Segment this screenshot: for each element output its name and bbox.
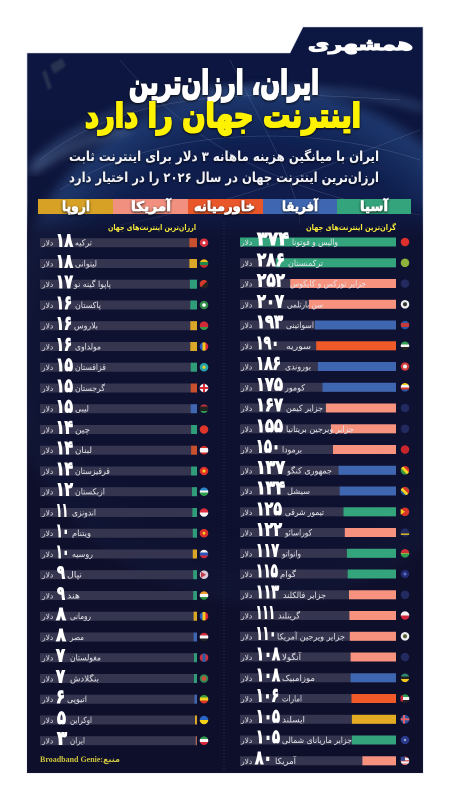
row: Iceland	[240, 705, 409, 727]
row: Saint Barthelemy: سن بارتلمی	[287, 300, 323, 310]
row: Republic of Congo	[240, 456, 409, 478]
row: Libya: دلار	[41, 405, 53, 414]
row: Nepal: دلار	[41, 571, 53, 580]
row: Bermuda: ۱۵۰	[256, 436, 280, 458]
row: Belarus	[40, 313, 208, 335]
row: Vanuatu: ۱۱۷	[256, 539, 279, 561]
heading: most expensive: گران‌ترین اینترنت‌های جهان	[306, 222, 396, 232]
row: Turkey: دلار	[41, 239, 53, 248]
row: Turkmenistan: دلار	[240, 259, 252, 268]
row: Pakistan: دلار	[41, 301, 53, 310]
row: Papua New Guinea: دلار	[41, 280, 53, 289]
row: Curacao: کوراسائو	[284, 528, 313, 538]
row: Guam	[240, 560, 409, 582]
row: Lebanon: لبنان	[75, 446, 92, 456]
row: Moldova	[40, 334, 208, 356]
row: Pakistan	[40, 292, 208, 314]
row: Georgia	[40, 375, 208, 397]
row: Republic of Congo: جمهوری کنگو	[286, 465, 332, 476]
row: Uzbekistan: ۱۲	[56, 479, 73, 501]
row: Egypt: ۸	[56, 624, 66, 646]
row: Romania: دلار	[41, 612, 53, 621]
row: Turkmenistan: ترکمنستان	[288, 259, 324, 269]
row: Curacao	[240, 518, 409, 540]
row: Comoros: دلار	[240, 383, 252, 392]
title: اینترنت جهان را دارد	[85, 96, 361, 136]
subtitle	[69, 148, 379, 186]
row: Mozambique: ۱۰۸	[256, 664, 280, 686]
row: Indonesia	[40, 500, 208, 522]
row: Cayman Islands: دلار	[240, 404, 252, 413]
row: US Virgin Islands: ۱۱۰	[256, 622, 276, 644]
row: Saint Barthelemy: دلار	[240, 300, 252, 309]
row: Greenland	[240, 602, 409, 624]
row: Ethiopia: اتیوپی	[67, 695, 87, 705]
row: Kyrgyzstan: ۱۴	[56, 458, 73, 480]
row: Papua New Guinea	[40, 271, 208, 293]
row: Russia: ۱۰	[56, 541, 69, 563]
row: Lebanon: ۱۴	[56, 437, 73, 459]
logo: همشهری	[308, 35, 413, 54]
row: Syria: ۱۹۰	[256, 332, 279, 354]
row: Ukraine: دلار	[41, 716, 53, 725]
row: Republic of Congo: دلار	[240, 466, 252, 475]
row: Guam: گوام	[280, 569, 297, 580]
row: Comoros: ۱۷۵	[256, 373, 283, 395]
row: Falkland Islands: ۱۱۳	[256, 581, 279, 603]
row: Nepal: ۹	[57, 562, 65, 584]
row: Egypt: مصر	[69, 633, 84, 643]
row: Moldova: مولداوی	[75, 342, 101, 352]
row: Mozambique	[240, 664, 409, 686]
row: Anguilla	[240, 643, 409, 665]
row: Burundi: دلار	[240, 362, 252, 372]
row: Ethiopia: دلار	[41, 695, 53, 704]
row: Moldova: دلار	[41, 342, 53, 352]
row: Bangladesh: دلار	[41, 674, 53, 684]
row: Lithuania: لیتوانی	[75, 260, 97, 270]
row: Mongolia: ۷	[56, 645, 65, 667]
row: China	[40, 416, 208, 438]
row: Bermuda: دلار	[240, 446, 252, 454]
row: Indonesia: اندونزی	[72, 508, 96, 518]
row: China: دلار	[41, 426, 53, 434]
row: Turkey: ۱۸	[56, 230, 73, 252]
row: Mozambique: دلار	[240, 674, 252, 683]
row: Iceland: ۱۰۵	[256, 705, 280, 727]
row: British Virgin Islands: دلار	[240, 425, 252, 434]
row: Turks and Caicos: ۲۵۲	[257, 270, 285, 292]
row: Northern Mariana Islands: ۱۰۵	[256, 726, 280, 748]
row: Curacao: ۱۲۲	[256, 518, 282, 540]
row: Anguilla: دلار	[240, 653, 252, 662]
row: Mongolia: دلار	[41, 654, 53, 663]
row: Egypt: دلار	[41, 633, 53, 642]
row: India: دلار	[41, 592, 53, 600]
row: UAE: دلار	[240, 694, 252, 704]
row: Pakistan: پاکستان	[75, 301, 102, 311]
row: Papua New Guinea: ۱۷	[56, 271, 73, 293]
row: Lebanon	[40, 437, 208, 459]
row: Uzbekistan	[40, 479, 208, 501]
row: Eswatini: ۱۹۳	[256, 311, 283, 333]
row: Burundi: بوروندی	[285, 362, 311, 372]
row: Northern Mariana Islands: دلار	[240, 736, 252, 745]
row: Vietnam: دلار	[41, 529, 53, 538]
row: Vietnam: ۱۰	[56, 520, 69, 542]
row: Turkmenistan	[240, 249, 409, 271]
row: Wallis and Futuna: دلار	[240, 238, 252, 247]
row: Greenland: گرینلند	[278, 610, 301, 622]
subtitle: ارزان‌ترین اینترنت جهان در سال ۲۰۲۶ را در اختیار دارد	[69, 170, 379, 186]
row: Wallis and Futuna	[240, 228, 409, 250]
row: Seychelles	[240, 477, 409, 499]
row: Turkey: ترکیه	[75, 239, 93, 249]
row: Cayman Islands: جزایر کیمن	[286, 404, 323, 414]
row: Nepal: نپال	[67, 571, 82, 581]
row: Uzbekistan: ازبکستان	[75, 488, 105, 498]
row: US Virgin Islands	[240, 622, 409, 644]
row: China: ۱۴	[56, 416, 73, 438]
row: Falkland Islands	[240, 581, 409, 603]
row: Syria: دلار	[240, 342, 252, 351]
row: Curacao: دلار	[240, 528, 252, 538]
title: ایران، ارزان‌ترین	[129, 63, 319, 103]
row: Anguilla: ۱۰۸	[256, 643, 280, 665]
row: Vanuatu: دلار	[240, 549, 252, 558]
row: Timor-Leste	[240, 498, 409, 520]
row: Kazakhstan: دلار	[41, 363, 53, 372]
row: Ukraine: اوکراین	[70, 716, 92, 726]
row: Northern Mariana Islands: جزایر ماریانای شمالی	[282, 736, 352, 746]
legend: continents: آمریکا	[131, 198, 171, 215]
row: Moldova: ۱۶	[56, 334, 72, 356]
row: Northern Mariana Islands	[240, 726, 409, 748]
row: Kazakhstan: ۱۵	[56, 354, 73, 376]
row: India	[40, 582, 208, 604]
row: Mozambique: موزامبیک	[282, 674, 315, 684]
row: Timor-Leste: دلار	[240, 508, 252, 517]
row: Guam: ۱۱۵	[256, 560, 278, 582]
row: Kyrgyzstan: دلار	[41, 467, 53, 476]
row: Seychelles: سیشل	[287, 487, 310, 497]
row: Indonesia: ۱۱	[56, 500, 68, 522]
row: United States: دلار	[240, 757, 252, 766]
row: UAE	[240, 684, 409, 706]
row: Greenland: ۱۱۱	[256, 602, 275, 624]
row: Ethiopia	[40, 686, 208, 708]
row: Iran: ۳	[57, 728, 67, 750]
row: Eswatini	[240, 311, 409, 333]
row: Vietnam	[40, 520, 208, 542]
row: Saint Barthelemy	[240, 290, 409, 312]
row: Vanuatu	[240, 539, 409, 561]
row: US Virgin Islands: جزایر ویرجین آمریکا	[277, 630, 345, 642]
row: British Virgin Islands: ۱۵۵	[256, 415, 283, 437]
row: Russia	[40, 541, 208, 563]
row: Kazakhstan: قزاقستان	[75, 363, 106, 373]
row: Greenland: دلار	[240, 612, 252, 620]
row: China: چین	[75, 426, 90, 436]
row: Russia: روسیه	[72, 550, 93, 560]
legend: continents: آفریقا	[282, 198, 318, 215]
row: Russia: دلار	[41, 550, 53, 559]
row: British Virgin Islands	[240, 415, 409, 437]
row: Burundi	[240, 352, 409, 374]
source note: Broadband Genie:منبع	[40, 754, 120, 765]
row: Ukraine	[40, 707, 208, 729]
row: Timor-Leste: تیمور شرقی	[285, 508, 325, 518]
row: Timor-Leste: ۱۲۵	[256, 498, 282, 520]
subtitle: ایران با میانگین هزینه ماهانه ۳ دلار برای اینترنت ثابت	[69, 148, 379, 165]
row: United States: آمریکا	[275, 755, 297, 767]
legend: continents	[38, 198, 411, 215]
row: Bermuda	[240, 436, 409, 458]
row: Comoros: کومور	[284, 383, 306, 393]
row: Syria	[240, 332, 409, 354]
row: Kyrgyzstan: قرقیزستان	[75, 467, 110, 477]
row: Ethiopia: ۶	[56, 686, 65, 708]
row: Bangladesh: ۷	[56, 666, 65, 688]
row: Kazakhstan	[40, 354, 208, 376]
row: Iran	[40, 728, 208, 750]
row: Georgia: دلار	[41, 384, 53, 393]
row: Wallis and Futuna: والیس و فوتونا	[292, 238, 338, 248]
heading: cheapest: ارزان‌ترین اینترنت‌های جهان	[108, 223, 196, 232]
row: British Virgin Islands: جزایر ویرجین بریتانیا	[286, 425, 354, 435]
row: Seychelles: دلار	[240, 487, 252, 496]
row: Turks and Caicos	[240, 270, 409, 292]
row: United States	[240, 747, 409, 769]
row: Iran: دلار	[41, 737, 53, 746]
row: Iceland: دلار	[240, 715, 252, 724]
row: India: هند	[67, 592, 80, 602]
row: Belarus: ۱۶	[56, 313, 72, 335]
row: Falkland Islands: جزایر فالکلند	[283, 591, 326, 601]
row: Papua New Guinea: پاپوا گینه نو	[73, 279, 112, 290]
legend: continents: خاورمیانه	[194, 199, 255, 215]
row: Turks and Caicos: دلار	[240, 280, 252, 288]
row: Turkey	[40, 230, 208, 252]
row: Romania: رومانی	[70, 612, 91, 622]
row: Guam: دلار	[240, 570, 252, 579]
row: Iran: ایران	[70, 737, 85, 747]
row: Lithuania	[40, 250, 208, 272]
row: Ukraine: ۵	[57, 707, 66, 729]
row: Falkland Islands: دلار	[240, 591, 252, 600]
row: Cayman Islands: ۱۶۷	[256, 394, 283, 416]
row: Libya: لیبی	[75, 405, 89, 415]
panel: cheapest internet list	[40, 230, 208, 750]
row: Nepal	[40, 562, 208, 584]
row: US Virgin Islands: دلار	[240, 632, 252, 641]
row: Eswatini: دلار	[240, 321, 252, 330]
row: Libya: ۱۵	[56, 396, 73, 418]
row: Pakistan: ۱۶	[56, 292, 72, 314]
row: UAE: امارات	[282, 694, 302, 704]
row: Seychelles: ۱۳۴	[256, 477, 285, 499]
legend: continents: آسیا	[360, 198, 388, 215]
row: Iceland: ایسلند	[282, 715, 305, 725]
row: Belarus: دلار	[41, 322, 53, 331]
row: India: ۹	[57, 582, 65, 604]
row: Comoros	[240, 373, 409, 395]
row: Lebanon: دلار	[41, 446, 53, 455]
row: Lithuania: دلار	[41, 260, 53, 268]
row: Burundi: ۱۸۶	[256, 352, 281, 374]
row: Syria: سوریه	[286, 342, 311, 352]
row: United States: ۸۰	[255, 747, 272, 769]
row: Anguilla: آنگولا	[282, 651, 302, 663]
row: Mongolia	[40, 645, 208, 667]
row: Turks and Caicos: جزایر تورکس و کایکوس	[290, 280, 366, 290]
row: Turkmenistan: ۲۸۶	[257, 249, 285, 271]
row: Georgia: ۱۵	[56, 375, 73, 397]
row: Indonesia: دلار	[41, 508, 53, 518]
row: Libya	[40, 396, 208, 418]
row: Saint Barthelemy: ۲۰۷	[257, 290, 284, 312]
row: Vietnam: ویتنام	[72, 529, 91, 539]
row: Vanuatu: وانواتو	[281, 549, 301, 559]
row: Belarus: بلاروس	[74, 322, 98, 332]
row: Kyrgyzstan	[40, 458, 208, 480]
row: Lithuania: ۱۸	[56, 250, 73, 272]
row: Romania: ۸	[56, 603, 66, 625]
row: Bangladesh: بنگلادش	[70, 674, 99, 684]
row: Cayman Islands	[240, 394, 409, 416]
row: Bangladesh	[40, 666, 208, 688]
row: Romania	[40, 603, 208, 625]
legend: continents: اروپا	[62, 199, 90, 215]
row: Wallis and Futuna: ۳۷۴	[257, 228, 289, 250]
title	[85, 63, 361, 136]
row: Republic of Congo: ۱۳۷	[256, 456, 285, 478]
row: Egypt	[40, 624, 208, 646]
row: Mongolia: مغولستان	[70, 654, 101, 664]
row: Bermuda: برمودا	[282, 446, 302, 456]
panel: most expensive internet list	[240, 228, 409, 769]
row: Georgia: گرجستان	[75, 383, 106, 394]
row: Eswatini: اسواتینی	[286, 321, 314, 331]
row: UAE: ۱۰۶	[256, 684, 279, 706]
row: Uzbekistan: دلار	[41, 488, 53, 497]
